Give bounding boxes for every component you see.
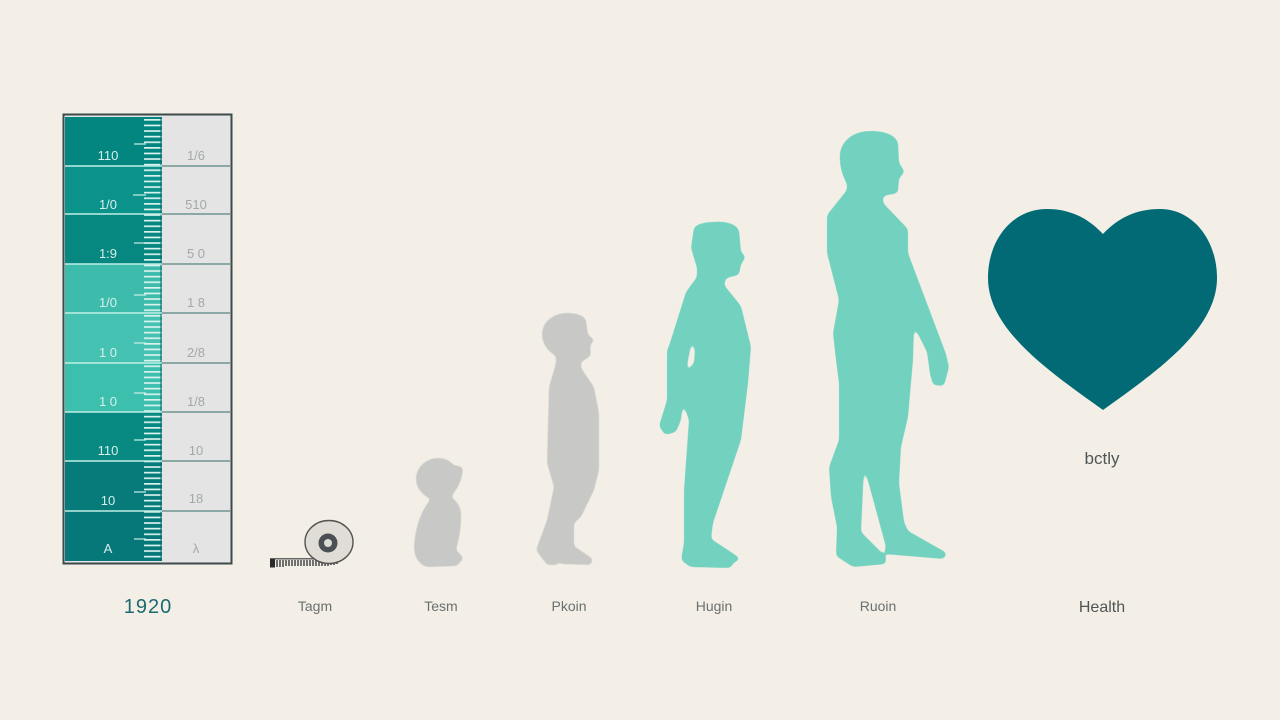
left scale labels: 1 0	[99, 345, 117, 360]
right scale labels: 18	[189, 491, 203, 506]
silhouette: teen	[659, 222, 751, 568]
right scale labels: 5 0	[187, 246, 205, 261]
teal scale bands	[65, 117, 162, 561]
label: teen: Hugin	[696, 598, 732, 614]
tick strip	[133, 117, 162, 561]
left scale labels: 1/0	[99, 295, 117, 310]
left scale labels: A	[104, 541, 113, 556]
silhouette: adult	[827, 131, 949, 567]
left scale labels: 1/0	[99, 197, 117, 212]
left scale labels: 110	[98, 443, 118, 458]
left scale labels: 1:9	[99, 246, 117, 261]
right scale labels: 510	[185, 197, 207, 212]
right scale labels: 2/8	[187, 345, 205, 360]
tape reel	[305, 520, 353, 564]
label: toddler: Tesm	[424, 598, 458, 614]
row dividers	[65, 166, 230, 511]
icon: tape measure	[270, 520, 353, 568]
heart caption: bctly	[1085, 449, 1120, 468]
left scale labels: 110	[98, 148, 118, 163]
right scale labels: λ	[193, 541, 200, 556]
right scale labels: 1/6	[187, 148, 205, 163]
silhouette: toddler	[414, 458, 464, 567]
left scale labels	[98, 148, 118, 556]
left scale labels: 10	[101, 493, 115, 508]
right scale labels: 1 8	[187, 295, 205, 310]
left scale labels: 1 0	[99, 394, 117, 409]
label: tape: Tagm	[298, 598, 332, 614]
silhouette: child	[536, 313, 599, 565]
right scale labels: 1/8	[187, 394, 205, 409]
right scale labels: 10	[189, 443, 203, 458]
icon: heart	[988, 209, 1217, 410]
ruler frame	[64, 114, 232, 564]
label: year: 1920	[124, 596, 172, 618]
label: adult: Ruoin	[860, 598, 896, 614]
label: child: Pkoin	[551, 598, 587, 614]
right scale labels	[185, 148, 207, 556]
panel: ruler chart	[64, 114, 232, 564]
timeline labels	[124, 596, 1125, 618]
tape strip	[270, 558, 340, 568]
label: health: Health	[1079, 599, 1125, 616]
